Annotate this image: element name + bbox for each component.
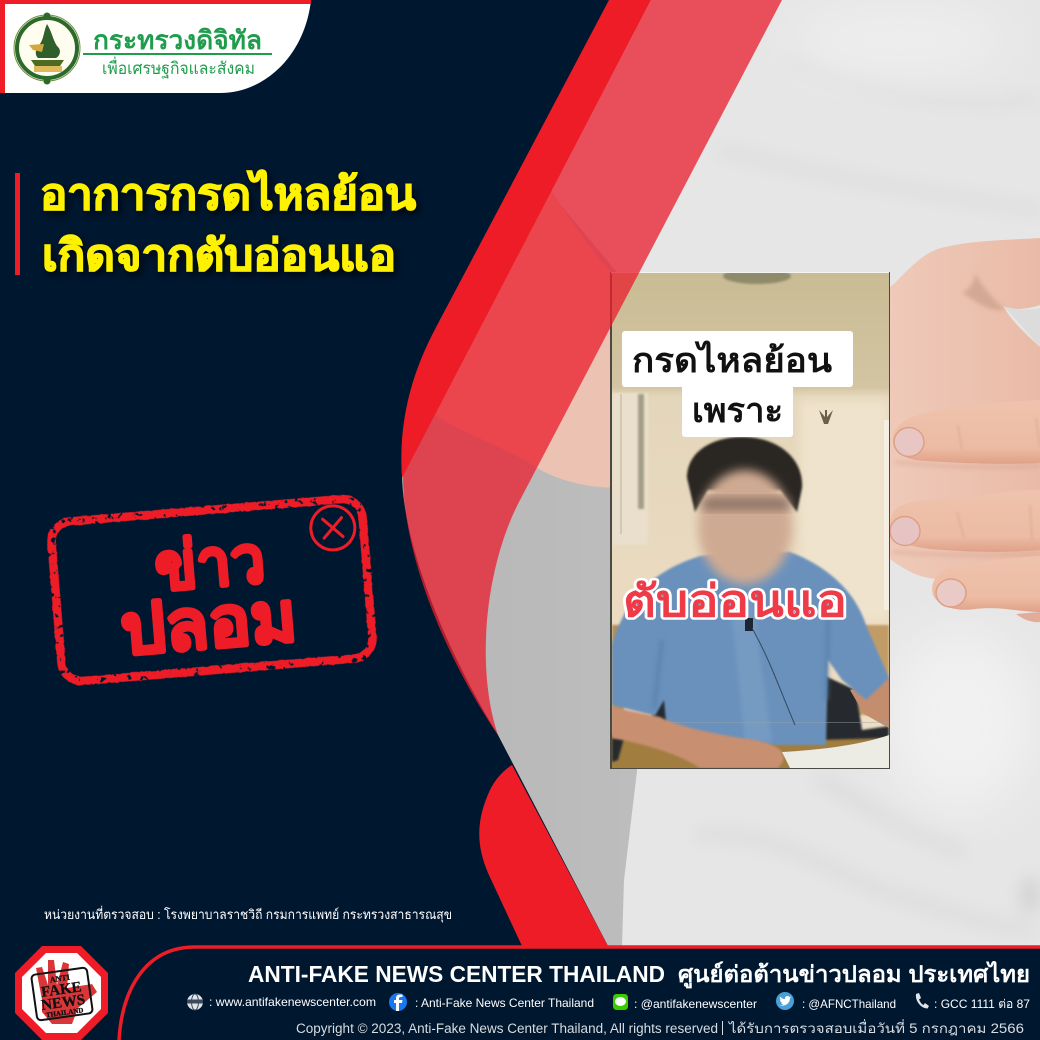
navy left panel bbox=[0, 0, 610, 946]
fake news stamp bbox=[50, 497, 374, 683]
thumb crease bbox=[962, 272, 1005, 310]
top caption box: เพราะ bbox=[692, 392, 783, 430]
copyright line: Copyright © 2023, Anti-Fake News Center Thailand, All rights reserved bbox=[296, 1021, 718, 1036]
contact row: : Anti-Fake News Center Thailand bbox=[415, 996, 594, 1010]
anti-fake news stop logo bbox=[15, 946, 108, 1040]
finger shadows bbox=[893, 462, 1040, 555]
right forearm bbox=[850, 678, 889, 728]
tilted label: THAILAND bbox=[45, 1006, 84, 1019]
left forearm and hand bbox=[612, 707, 784, 768]
ministry emblem bbox=[14, 12, 80, 84]
tilted label: NEWS bbox=[40, 992, 86, 1014]
nail 2 bbox=[890, 516, 920, 546]
arm bbox=[435, 180, 890, 560]
wood panels and desk bbox=[612, 625, 624, 755]
grey backdrop bbox=[400, 0, 700, 950]
shirt bbox=[612, 552, 889, 745]
paper bbox=[782, 735, 889, 768]
knuckle creases bbox=[957, 418, 1040, 540]
icon: twitter bbox=[776, 992, 794, 1010]
contact row: : www.antifakenewscenter.com bbox=[209, 995, 376, 1009]
nail 3 bbox=[936, 579, 966, 607]
room bbox=[612, 273, 889, 768]
heading bbox=[15, 169, 417, 280]
copyright line: ได้รับการตรวจสอบเมื่อวันที่ 5 กรกฎาคม 2566 bbox=[728, 1019, 1024, 1036]
footer title bbox=[248, 960, 1030, 989]
top caption box: กรดไหลย้อน bbox=[632, 340, 832, 380]
translucent red band bbox=[403, 0, 782, 735]
tilted label: FAKE bbox=[40, 979, 83, 1001]
fingers bbox=[890, 400, 1040, 622]
finger 2 bbox=[890, 490, 1040, 552]
nail 1 bbox=[894, 428, 924, 456]
finger 3 bbox=[932, 556, 1040, 612]
icon: facebook bbox=[389, 993, 407, 1011]
solid red band bbox=[401, 0, 651, 478]
copyright line bbox=[296, 1019, 1024, 1036]
hand: palm and thumb bbox=[889, 238, 1040, 600]
stamp frame bbox=[50, 497, 374, 683]
stamp text: ข่าว bbox=[152, 522, 268, 604]
ministry subtitle: เพื่อเศรษฐกิจและสังคม bbox=[102, 56, 255, 79]
blurred head bbox=[687, 437, 802, 584]
chair bbox=[612, 672, 889, 762]
ministry logo panel bbox=[0, 0, 311, 93]
bright shirt patches bbox=[885, 630, 1035, 810]
top caption box bbox=[622, 331, 853, 437]
footer bar bbox=[119, 947, 1040, 1040]
contact row: : @AFNCThailand bbox=[802, 997, 896, 1011]
background photo: shirt and hand bbox=[400, 0, 1040, 950]
icon: globe bbox=[187, 994, 203, 1010]
finger 1 bbox=[893, 400, 1040, 464]
source note: หน่วยงานที่ตรวจสอบ : โรงพยาบาลราชวิถี กรมการแพทย์ กระทรวงสาธารณสุข bbox=[44, 906, 452, 923]
contact row: : GCC 1111 ต่อ 87 bbox=[934, 997, 1030, 1011]
tilted label: ANTI bbox=[49, 973, 70, 984]
icon: line bbox=[613, 994, 628, 1010]
red hand print bbox=[36, 960, 97, 1024]
finger 4 bbox=[1016, 612, 1040, 622]
heading: เกิดจากตับอ่อนแอ bbox=[42, 232, 396, 280]
microphone bbox=[745, 618, 753, 631]
inset video screenshot bbox=[610, 268, 890, 769]
contact row bbox=[187, 992, 1030, 1011]
white shirt bbox=[480, 0, 1040, 946]
red rounded triangle bbox=[479, 765, 608, 946]
tilted label bbox=[31, 967, 93, 1021]
curtain bbox=[612, 393, 648, 545]
shirt folds bbox=[700, 60, 1040, 930]
x circle bbox=[309, 504, 357, 552]
footer title: ANTI-FAKE NEWS CENTER THAILAND bbox=[248, 961, 665, 987]
heading: อาการกรดไหลย้อน bbox=[40, 169, 417, 219]
footer title: ศูนย์ต่อต้านข่าวปลอม ประเทศไทย bbox=[678, 960, 1030, 989]
contact row: : @antifakenewscenter bbox=[634, 997, 757, 1011]
fake news stamp: ปลอม bbox=[118, 577, 300, 669]
ministry name: กระทรวงดิจิทัล bbox=[93, 25, 262, 55]
red caption: ตับอ่อนแอ bbox=[623, 577, 847, 626]
icon: phone bbox=[916, 993, 929, 1008]
